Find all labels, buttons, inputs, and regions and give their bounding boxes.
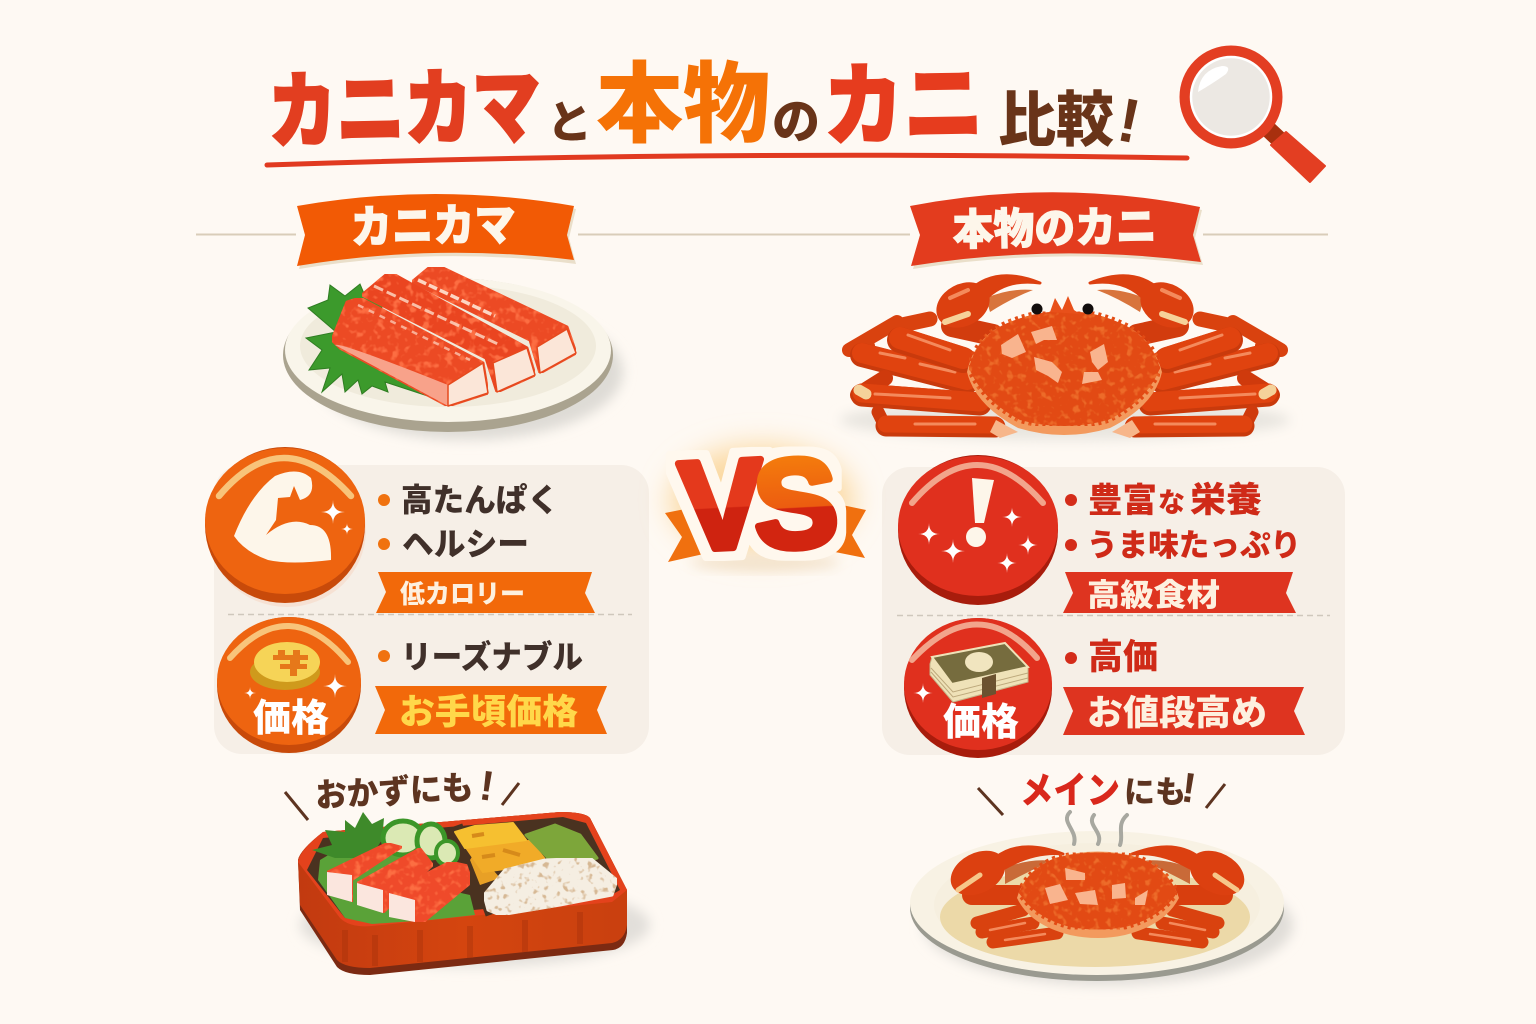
icon: muscle badge	[205, 447, 366, 607]
illustration: crab sticks on plate	[283, 267, 623, 440]
caption: メインにも	[978, 763, 1225, 815]
ribbon: 低カロリー	[376, 572, 595, 613]
caption: おかずにも: おかずにも	[314, 769, 474, 814]
ribbon: 低カロリー: 低カロリー	[400, 579, 525, 609]
heading ribbon: カニカマ: カニカマ	[350, 199, 516, 253]
bento: rice	[484, 858, 617, 915]
icon: banknote price badge: 価格	[943, 702, 1019, 744]
bullet: 豊富な栄養: な	[1158, 488, 1185, 518]
title underline	[267, 155, 1187, 165]
VS badge: S	[750, 431, 841, 576]
ribbon: お値段高め: お値段高め	[1087, 694, 1267, 733]
ribbon: お値段高め	[1063, 687, 1305, 735]
bullet: 豊富な栄養: 栄養	[1190, 481, 1262, 520]
bento: divider	[458, 825, 490, 915]
crab shell	[967, 296, 1162, 438]
title: と	[547, 97, 592, 148]
icon: exclamation badge	[898, 455, 1058, 605]
heading ribbon: カニカマ	[297, 194, 576, 269]
title: カニ	[823, 55, 984, 158]
title: !	[1112, 86, 1146, 157]
ribbon: 高級食材: 高級食材	[1087, 578, 1220, 613]
left half of plated crab	[943, 842, 1063, 942]
bullet: 高たんぱく: 高たんぱく	[401, 482, 559, 518]
caption: メインにも: にも	[1124, 775, 1186, 810]
bullet: うま味たっぷり: うま味たっぷり	[1087, 528, 1301, 563]
illustration: king crab	[840, 273, 1290, 440]
caption: おかずにも: !	[477, 761, 497, 810]
VS badge	[665, 431, 866, 577]
VS badge: V	[676, 432, 767, 577]
title	[267, 55, 1146, 159]
divider lines	[196, 234, 1328, 236]
bullet: ヘルシー: ヘルシー	[402, 526, 529, 562]
bullet: 高価: 高価	[1088, 638, 1158, 677]
illustration: steam	[1067, 812, 1127, 845]
bullet: 豊富な栄養	[1065, 481, 1262, 520]
bento: greens side	[526, 825, 597, 860]
panel: real crab features	[882, 455, 1345, 758]
heading ribbon: 本物のカニ: 本物のカニ	[952, 203, 1157, 255]
ribbon: 高級食材	[1063, 572, 1296, 613]
icon: coin price badge	[217, 617, 361, 753]
title: 本物	[596, 55, 770, 154]
bullet: 豊富な栄養: 豊富	[1088, 482, 1157, 520]
illustration: crab on plate	[910, 831, 1293, 985]
title: カニカマ	[267, 60, 541, 159]
icon: magnifying glass	[1185, 51, 1325, 182]
ribbon: お手頃価格	[375, 686, 607, 734]
icon: coin price badge: 価格	[253, 698, 329, 740]
title: 比較	[998, 87, 1114, 154]
heading ribbon: 本物のカニ	[910, 192, 1203, 269]
caption: メインにも: メイン	[1020, 770, 1120, 811]
bento: crab sticks	[327, 843, 470, 922]
plated crab shell	[1017, 852, 1179, 938]
bullet: リーズナブル: リーズナブル	[401, 639, 583, 675]
bento: tamagoyaki	[455, 823, 544, 885]
ribbon: お手頃価格: お手頃価格	[399, 693, 578, 732]
illustration: bento box	[298, 812, 650, 975]
panel: kanikama features	[205, 447, 649, 754]
caption: メインにも: !	[1179, 763, 1199, 812]
icon: banknote price badge	[904, 618, 1052, 758]
left half of crab legs and claw	[849, 273, 1040, 427]
caption: おかずにも	[285, 761, 519, 820]
title: の	[772, 96, 820, 149]
bento: greens and cucumber	[312, 812, 475, 924]
